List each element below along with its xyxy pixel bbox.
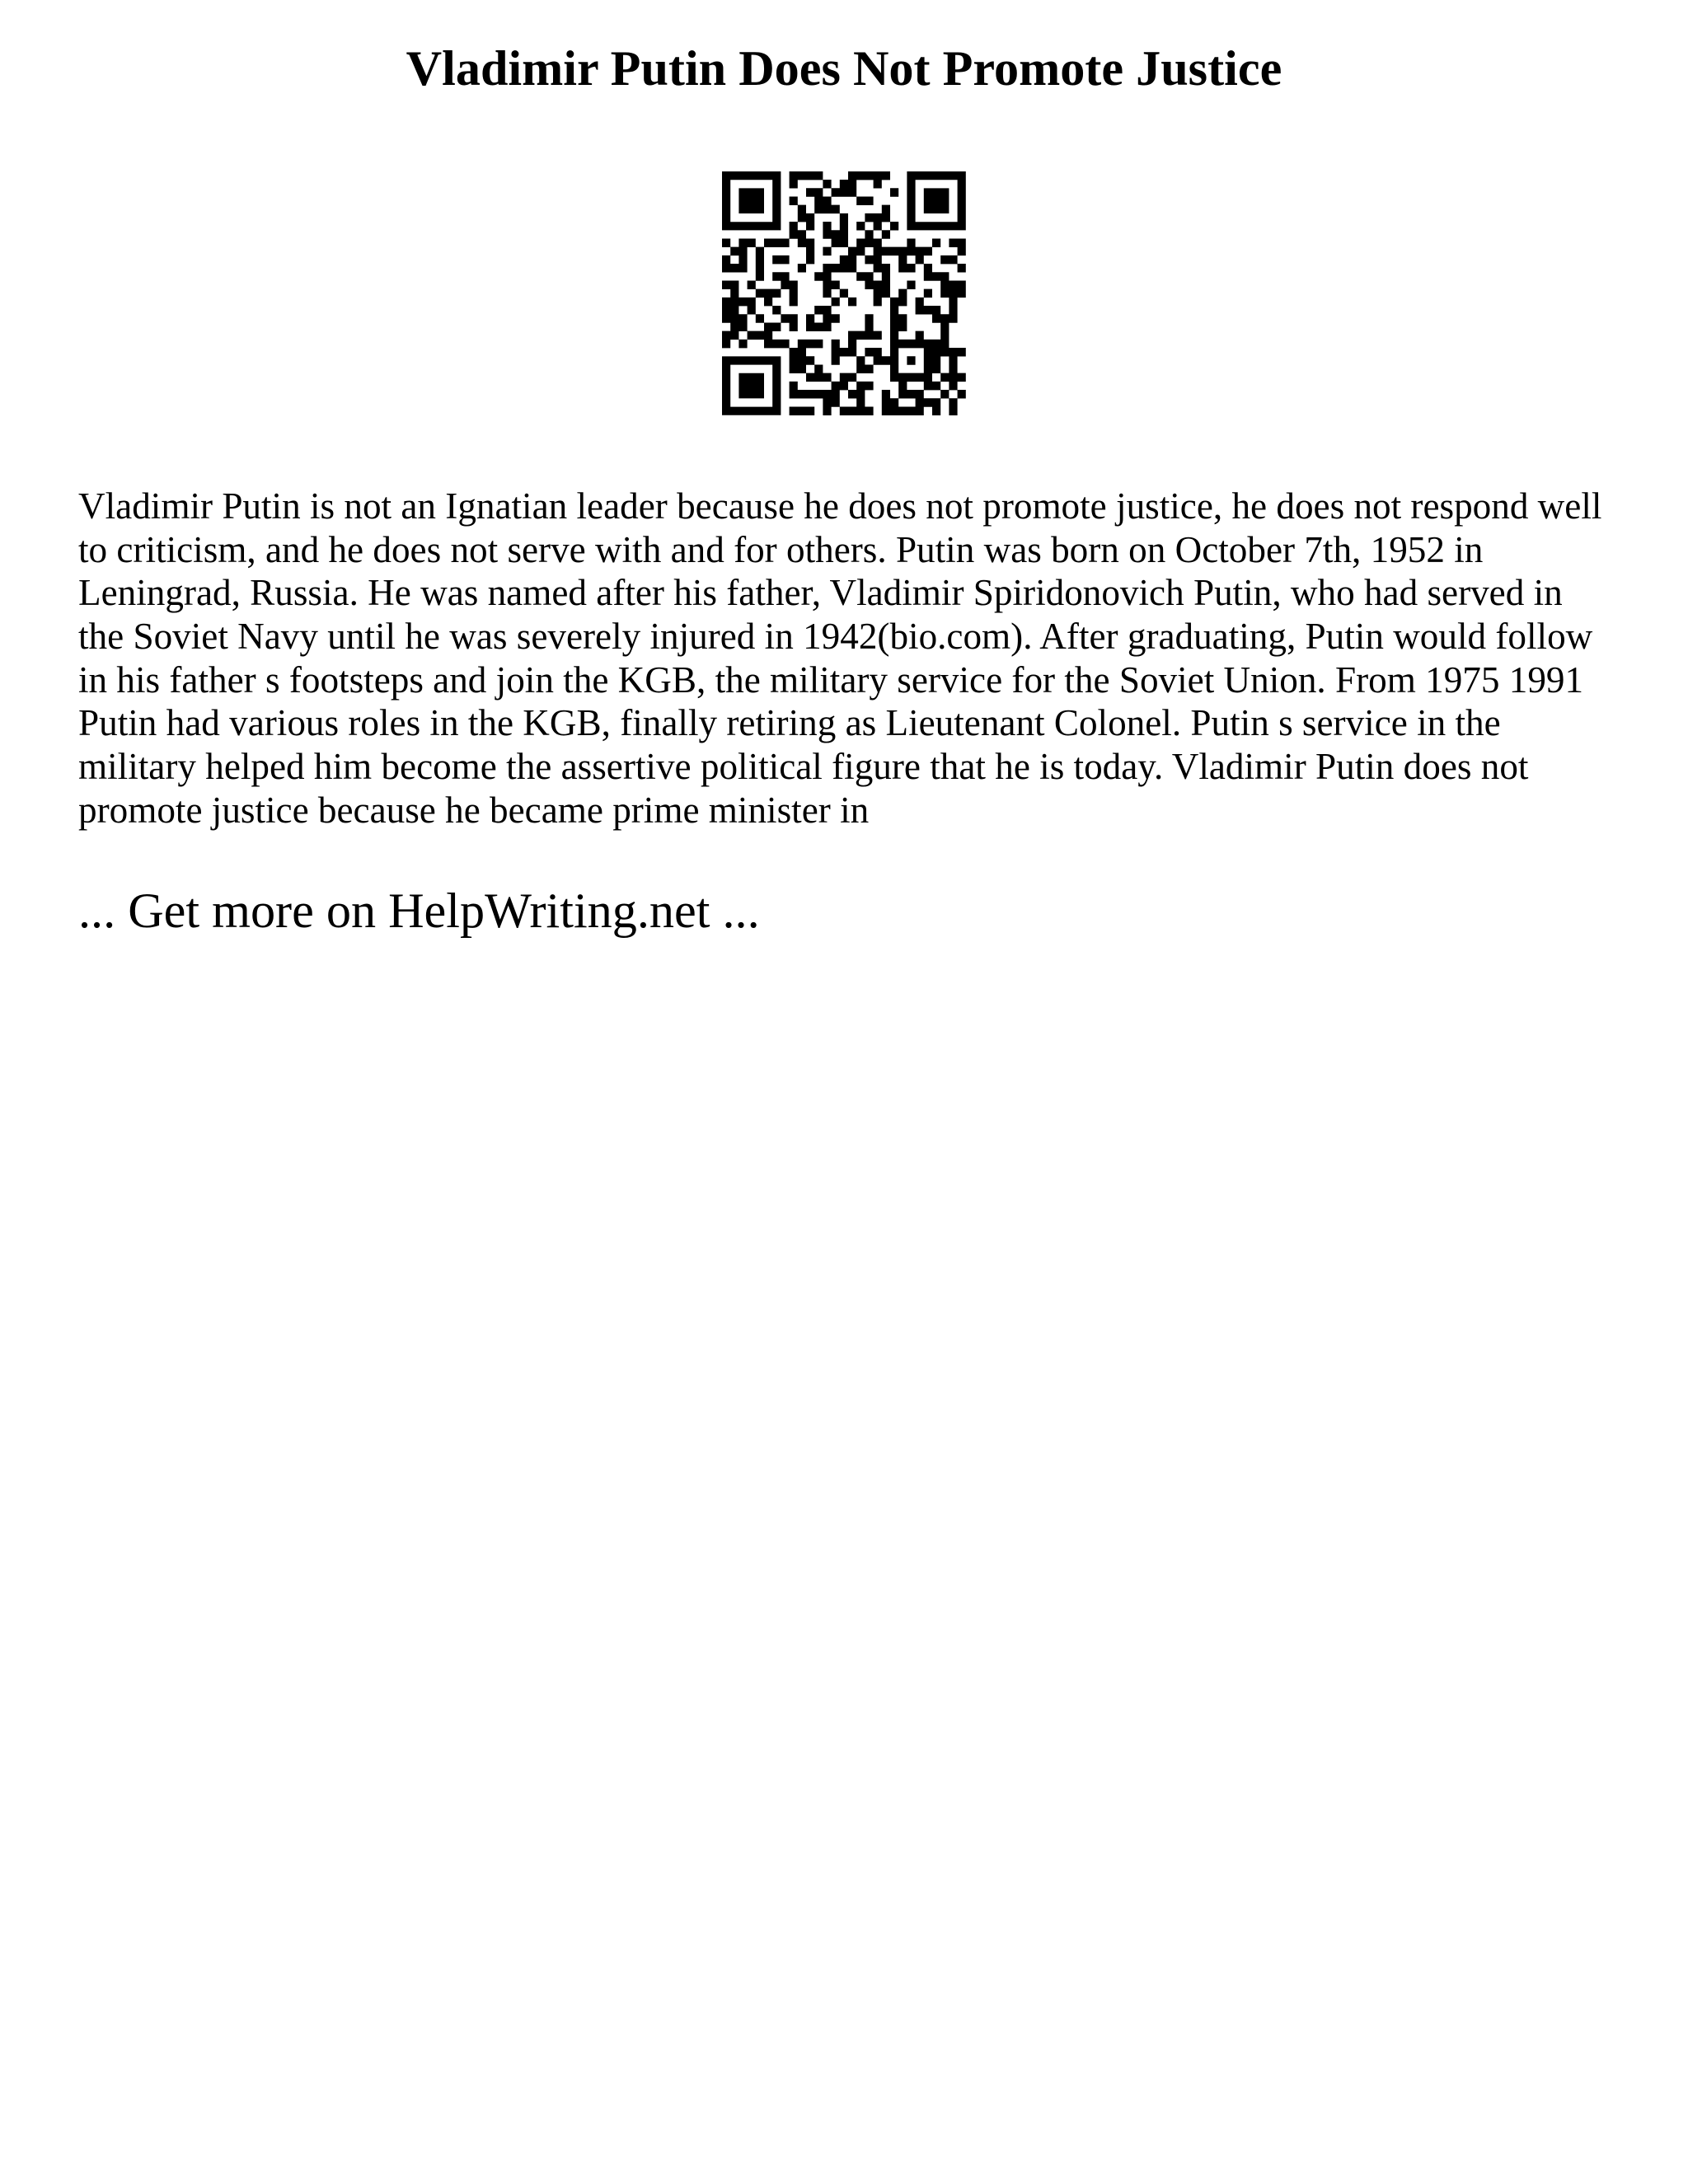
body paragraph: in his father s footsteps and join the KGB, the military service for the Soviet Union. From 1975 1991 (78, 659, 1583, 701)
body paragraph: military helped him become the assertive political figure that he is today. Vladimir Putin does not (78, 746, 1528, 787)
body paragraph: Putin had various roles in the KGB, finally retiring as Lieutenant Colonel. Putin s service in the (78, 702, 1501, 743)
body paragraph (78, 485, 1601, 831)
body paragraph: to criticism, and he does not serve with and for others. Putin was born on October 7th, 1952 in (78, 529, 1483, 570)
title: Vladimir Putin Does Not Promote Justice (406, 41, 1282, 96)
QR code (722, 171, 966, 415)
call to action line: ... Get more on HelpWriting.net ... (78, 883, 760, 939)
body paragraph: Leningrad, Russia. He was named after his father, Vladimir Spiridonovich Putin, who had served in (78, 572, 1563, 613)
body paragraph: the Soviet Navy until he was severely injured in 1942(bio.com). After graduating, Putin would follow (78, 616, 1592, 657)
body paragraph: promote justice because he became prime minister in (78, 790, 869, 831)
body paragraph: Vladimir Putin is not an Ignatian leader because he does not promote justice, he does not respond well (78, 485, 1601, 527)
